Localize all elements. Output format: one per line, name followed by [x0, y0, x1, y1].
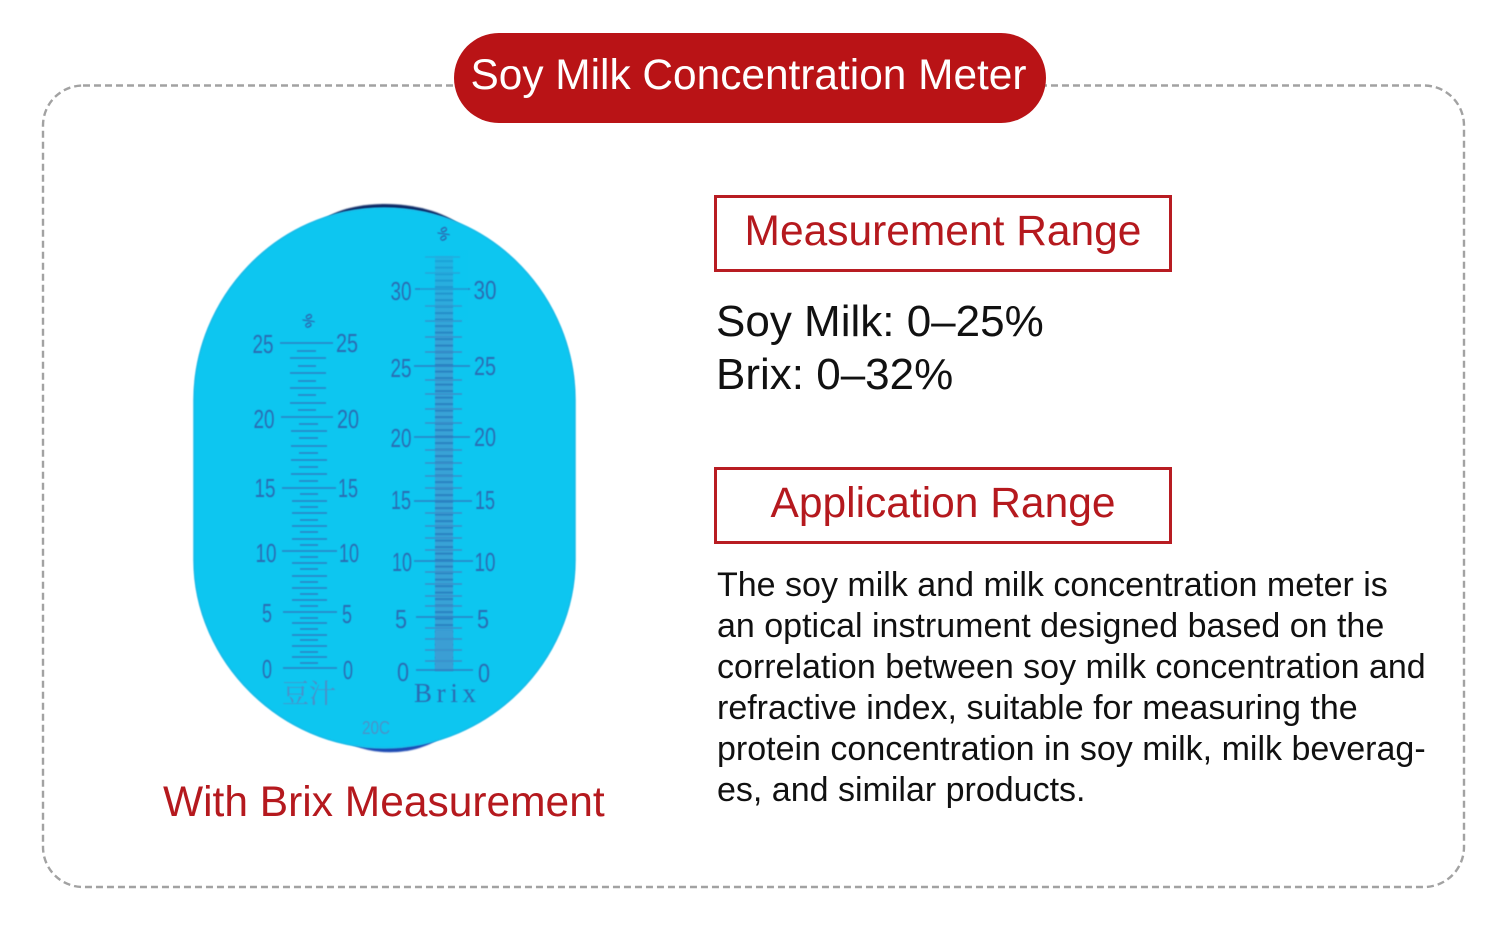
scale numbers: 30 — [390, 276, 412, 306]
scale numbers: 10 — [256, 538, 276, 568]
text: application description: correlation between soy milk concentration and — [717, 648, 1426, 686]
title: Soy Milk Concentration Meter — [470, 51, 1026, 98]
image caption: With Brix Measurement — [163, 779, 605, 826]
scale numbers: 0 — [262, 654, 272, 684]
blue lens field — [194, 208, 575, 748]
brix bar lower section — [435, 630, 453, 671]
scale numbers: 5 — [262, 598, 272, 628]
scale numbers: 15 — [254, 473, 276, 503]
scale numbers: 15 — [338, 473, 358, 503]
scale numbers: 10 — [339, 538, 359, 568]
title — [454, 33, 1046, 123]
scale numbers: 15 — [391, 485, 411, 515]
scale numbers: 10 — [474, 547, 496, 577]
brix scale ticks — [414, 257, 473, 670]
text: measurement values: Soy Milk: 0–25% — [716, 297, 1044, 346]
scale numbers: 0 — [343, 655, 353, 685]
scale numbers: 5 — [395, 604, 407, 634]
percent signs — [298, 224, 454, 331]
scale numbers: 20 — [337, 404, 359, 434]
scale numbers: 20 — [474, 422, 496, 452]
temperature label: 20C — [362, 718, 390, 738]
scale numbers: 5 — [477, 604, 489, 634]
text: application description: es, and similar products. — [717, 771, 1086, 809]
scale numbers: 30 — [474, 275, 496, 305]
percent signs: % — [433, 224, 454, 244]
scale numbers: 25 — [252, 329, 274, 359]
text: application description: an optical instrument designed based on the — [717, 607, 1384, 645]
scale numbers: 25 — [336, 328, 358, 358]
text: measurement values — [716, 297, 1044, 399]
scale numbers: 25 — [474, 351, 496, 381]
dark lens arc, top — [318, 204, 462, 226]
brix scale top fade — [420, 250, 468, 340]
text: measurement values: Brix: 0–32% — [716, 350, 953, 399]
scale numbers: 5 — [342, 599, 352, 629]
scale numbers: 25 — [390, 353, 412, 383]
scale numbers — [252, 275, 496, 688]
text: application description: protein concentration in soy milk, milk beverag- — [717, 730, 1426, 768]
scale numbers: 20 — [254, 404, 274, 434]
scale numbers: 10 — [392, 547, 412, 577]
percent signs: % — [298, 311, 319, 331]
soy milk scale ticks — [280, 343, 337, 668]
scale numbers: 15 — [475, 485, 495, 515]
text: application description: The soy milk and milk concentration meter is — [717, 566, 1388, 604]
scale numbers: 0 — [478, 658, 490, 688]
brix scale bar — [435, 256, 453, 671]
heading: measurement range — [714, 195, 1172, 272]
chart: refractometer scale view — [192, 202, 577, 754]
heading: measurement range: Measurement Range — [745, 208, 1141, 255]
scale numbers: 20 — [390, 423, 412, 453]
text: application description: refractive index, suitable for measuring the — [717, 689, 1358, 727]
scale name: soy milk: 豆汁 — [282, 679, 336, 709]
scale numbers: 0 — [397, 657, 409, 687]
heading: application range: Application Range — [771, 480, 1115, 527]
scale name: brix: Brix — [414, 678, 476, 708]
dark lens arc, bottom — [335, 735, 445, 752]
text: application description — [717, 566, 1426, 809]
heading: application range — [714, 467, 1172, 544]
